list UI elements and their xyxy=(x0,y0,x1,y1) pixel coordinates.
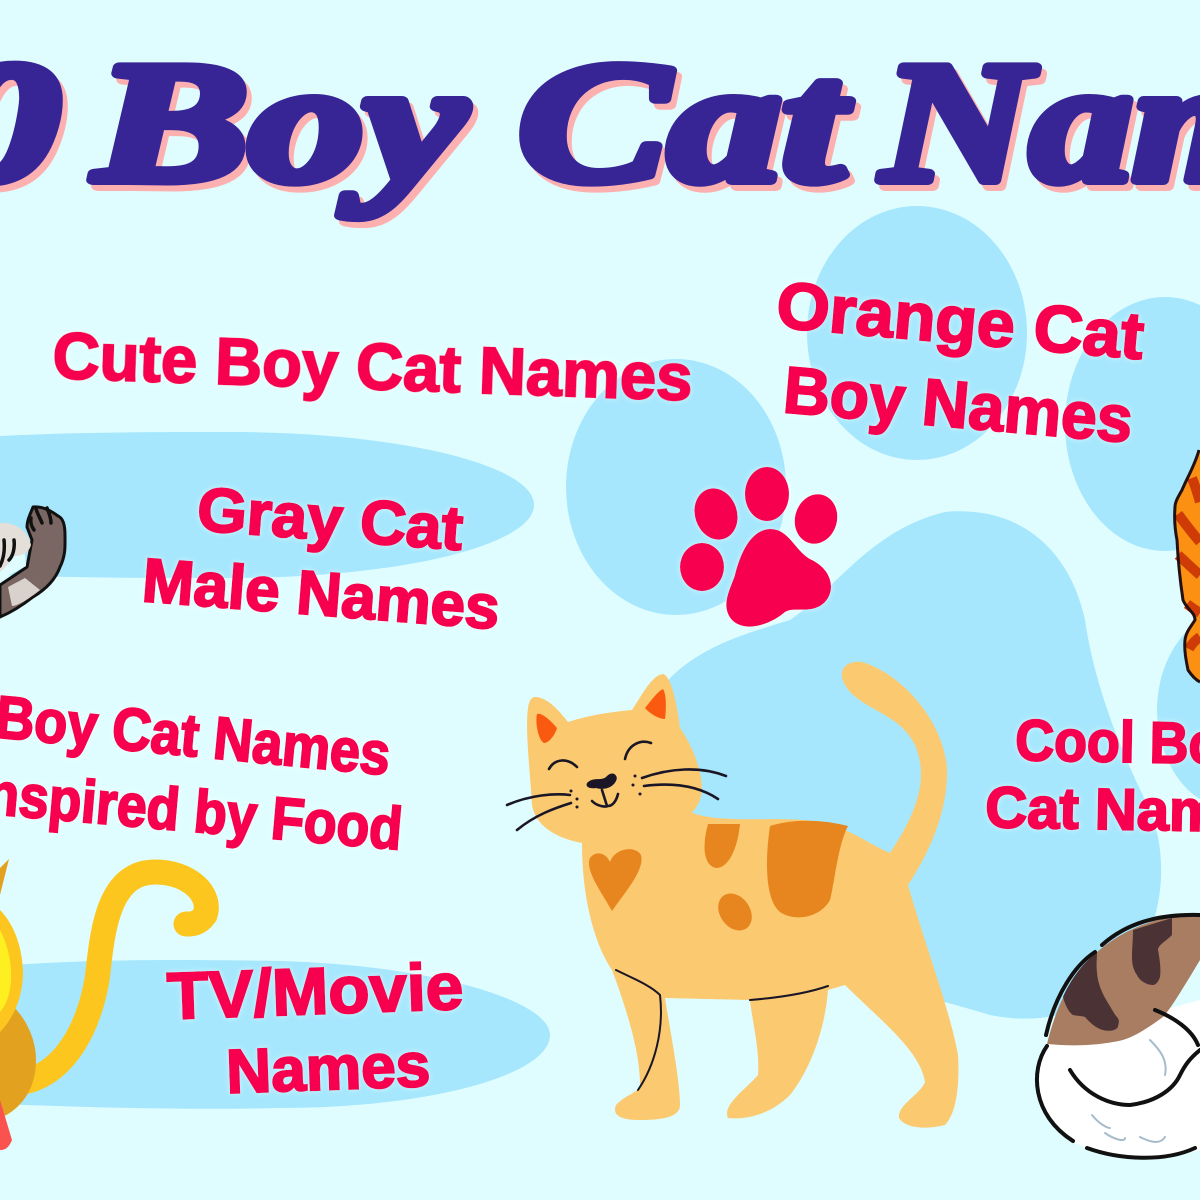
left oval: tv/movie xyxy=(0,960,550,1109)
title: Cat xyxy=(518,28,851,218)
body lines xyxy=(616,970,828,1090)
cat: gray cat, cropped left xyxy=(0,507,65,617)
whisker dots xyxy=(570,774,642,808)
tail and body xyxy=(582,662,958,1128)
label: gray cat male names: Male Names xyxy=(140,546,502,643)
title: Boy xyxy=(97,34,472,224)
label: boy cat names inspired by food xyxy=(0,683,405,863)
label: tv/movie names: Names xyxy=(225,1031,431,1107)
label: tv/movie names: TV/Movie xyxy=(166,949,464,1033)
cat: curled calico cat, cropped right xyxy=(1037,915,1200,1158)
title xyxy=(0,28,1200,224)
title: Cat xyxy=(523,34,856,224)
head xyxy=(527,674,702,845)
cat: sitting orange spotted cat xyxy=(507,662,958,1128)
cat: yellow cat, cropped left xyxy=(0,859,206,1150)
label: gray cat male names: Gray Cat xyxy=(195,475,465,564)
ears inner xyxy=(536,714,557,743)
label: boy cat names inspired by food: Boy Cat Names xyxy=(0,683,393,788)
left oval: gray cat xyxy=(0,432,534,578)
spots xyxy=(589,821,848,937)
icon: pink paw xyxy=(680,467,843,627)
big paw background xyxy=(566,206,1200,1019)
label: gray cat male names xyxy=(140,475,502,643)
cat: orange striped cat, cropped right xyxy=(1175,450,1200,682)
nose xyxy=(587,773,617,789)
label: orange cat boy names: Boy Names xyxy=(781,352,1136,456)
title: Boy xyxy=(92,28,467,218)
face lines xyxy=(507,742,726,830)
label: tv/movie names xyxy=(166,949,464,1107)
label: cute boy cat names: Cute Boy Cat Names xyxy=(52,318,694,414)
label: orange cat boy names xyxy=(774,267,1147,456)
label: cool boy cat names xyxy=(985,708,1200,845)
label: orange cat boy names: Orange Cat xyxy=(774,267,1147,373)
